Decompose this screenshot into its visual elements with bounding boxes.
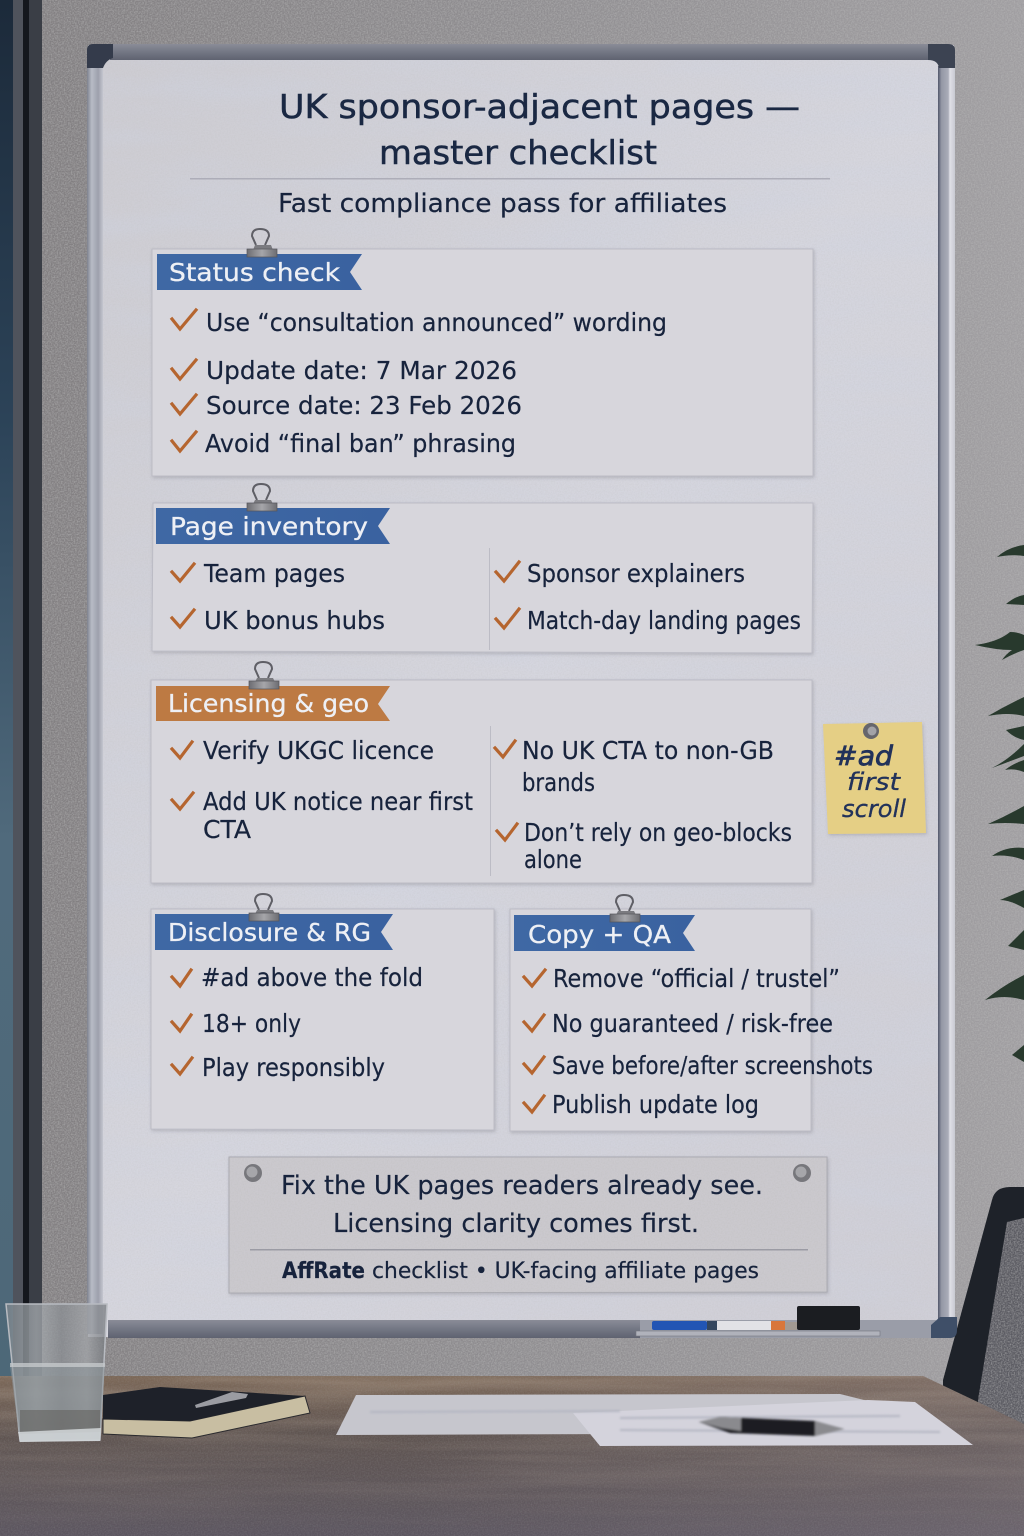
item: Publish update log bbox=[552, 1090, 759, 1119]
item: 18+ only bbox=[202, 1009, 301, 1038]
panel: licensing and geo bbox=[151, 662, 812, 883]
clip bbox=[249, 894, 279, 921]
title: UK sponsor-adjacent pages — bbox=[279, 87, 800, 126]
callout text: Licensing clarity comes first. bbox=[333, 1209, 699, 1239]
sticky text: first bbox=[847, 768, 902, 796]
frame corner top right bbox=[928, 44, 955, 68]
panel: copy and QA bbox=[510, 895, 873, 1131]
ribbon: status check bbox=[157, 254, 362, 290]
item bbox=[495, 736, 774, 797]
ribbon: status check: Status check bbox=[169, 258, 341, 287]
item bbox=[172, 787, 473, 844]
ribbon: page inventory: Page inventory bbox=[170, 512, 368, 541]
plant leaves bbox=[975, 545, 1024, 1062]
sticky text: scroll bbox=[842, 795, 906, 823]
footer credit: checklist • UK-facing affiliate pages bbox=[372, 1259, 759, 1284]
pin left bbox=[244, 1164, 262, 1182]
clip bbox=[610, 895, 640, 922]
back sheet bbox=[336, 1394, 872, 1435]
front sheet bbox=[573, 1400, 973, 1446]
chair bbox=[943, 1187, 1024, 1440]
item: #ad above the fold bbox=[201, 963, 423, 992]
panel: footer callout bbox=[229, 1157, 827, 1293]
footer credit: AffRate bbox=[282, 1259, 365, 1284]
pin bbox=[863, 723, 879, 739]
sticky text: #ad bbox=[834, 741, 894, 772]
item: Avoid “final ban” phrasing bbox=[205, 429, 516, 458]
frame bottom bar bbox=[108, 1320, 640, 1338]
item: Use “consultation announced” wording bbox=[206, 308, 667, 337]
item: Verify UKGC licence bbox=[203, 736, 434, 765]
water glass bbox=[6, 1304, 107, 1442]
desk bbox=[0, 1376, 1024, 1536]
frame corner top left bbox=[87, 44, 113, 68]
item bbox=[497, 818, 792, 874]
sticky text bbox=[834, 741, 906, 823]
papers on desk bbox=[336, 1394, 973, 1446]
item: Team pages bbox=[203, 559, 345, 588]
item: Update date: 7 Mar 2026 bbox=[206, 356, 517, 385]
clip bbox=[249, 662, 279, 689]
pin right bbox=[793, 1164, 811, 1182]
item: Remove “official / trustel” bbox=[553, 964, 840, 993]
ribbon: disclosure and RG bbox=[155, 914, 393, 950]
notebook bbox=[103, 1387, 310, 1438]
title bbox=[279, 87, 800, 172]
frame corner bottom right bbox=[931, 1317, 957, 1338]
ribbon: copy and QA: Copy + QA bbox=[528, 920, 671, 949]
item: Don’t rely on geo-blocks bbox=[524, 818, 792, 847]
pages bbox=[103, 1396, 310, 1438]
item bbox=[172, 1009, 301, 1038]
window and frame on the left bbox=[0, 0, 42, 1400]
whiteboard bbox=[87, 44, 957, 1338]
subtitle: Fast compliance pass for affiliates bbox=[278, 189, 727, 219]
panel: disclosure and RG bbox=[151, 894, 494, 1130]
panel: status check bbox=[152, 229, 813, 476]
item: Add UK notice near first bbox=[203, 787, 473, 816]
clip bbox=[247, 484, 277, 511]
item: CTA bbox=[203, 815, 251, 844]
item: Match-day landing pages bbox=[527, 606, 801, 635]
clip bbox=[247, 229, 277, 257]
blue marker bbox=[652, 1321, 717, 1330]
sticky note bbox=[823, 722, 926, 834]
item: alone bbox=[524, 845, 582, 874]
frame top bar bbox=[110, 44, 930, 60]
frame left bar bbox=[87, 66, 103, 1334]
frame right bar bbox=[938, 66, 955, 1322]
tray bbox=[636, 1331, 880, 1336]
panel: page inventory bbox=[152, 484, 813, 653]
item: UK bonus hubs bbox=[204, 606, 385, 635]
ribbon: licensing and geo: Licensing & geo bbox=[168, 689, 369, 718]
pen on papers bbox=[699, 1417, 844, 1436]
board surface bbox=[88, 45, 954, 1337]
orange marker bbox=[717, 1321, 797, 1330]
ribbon: disclosure and RG: Disclosure & RG bbox=[168, 918, 371, 947]
marker tray bbox=[636, 1306, 880, 1336]
item: Save before/after screenshots bbox=[552, 1051, 873, 1080]
cover bbox=[103, 1387, 305, 1421]
ribbon: copy and QA bbox=[514, 915, 695, 951]
eraser bbox=[797, 1306, 860, 1330]
frame bottom bar right bbox=[640, 1320, 936, 1338]
clip pen bbox=[195, 1392, 248, 1408]
item: No guaranteed / risk-free bbox=[552, 1009, 833, 1038]
item: No UK CTA to non-GB bbox=[522, 736, 774, 765]
callout text bbox=[281, 1171, 763, 1239]
item: Sponsor explainers bbox=[527, 559, 745, 588]
title: master checklist bbox=[379, 133, 657, 172]
ribbon: page inventory bbox=[156, 508, 390, 544]
callout text: Fix the UK pages readers already see. bbox=[281, 1171, 763, 1201]
item: Source date: 23 Feb 2026 bbox=[206, 391, 522, 420]
item: brands bbox=[522, 768, 595, 797]
item: Play responsibly bbox=[202, 1053, 385, 1082]
